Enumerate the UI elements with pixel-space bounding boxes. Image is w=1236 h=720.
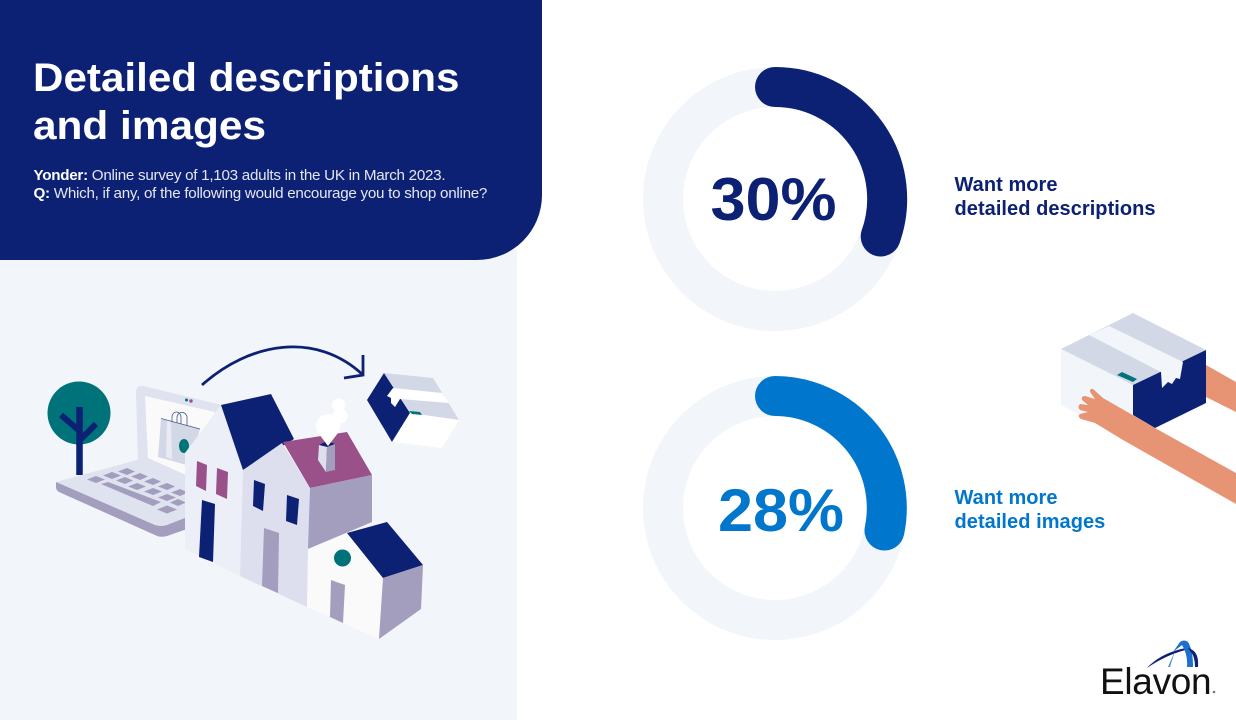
chimney and smoke [316,398,348,472]
label: want more detailed descriptions: detailed descriptions [954,198,1156,220]
logo: Elavon [1100,640,1215,702]
title: Detailed descriptions [33,56,460,100]
left arm and hand [1078,389,1236,504]
label: want more detailed images: detailed images [954,511,1105,533]
value: 30%: 30% [710,166,836,233]
survey source text: Q: Which, if any, of the following would encourage you to shop online? [34,185,487,202]
illustration: laptop [56,386,222,537]
value: 28%: 28% [718,477,844,544]
right arm [1206,365,1236,412]
chart: 28% donut [663,396,887,620]
illustration: tree [48,382,110,475]
keyboard keys [87,468,188,514]
panel: header [0,0,542,260]
house two [240,432,372,607]
title: and images [33,104,266,148]
illustration: houses [185,394,423,639]
house one [185,394,294,576]
arrow: laptop to parcel [202,347,363,385]
chart: 30% donut [663,87,887,311]
title [33,56,460,148]
label: want more detailed images: Want more [954,487,1058,509]
label: want more detailed descriptions: Want more [954,174,1058,196]
wordmark: Elavon [1100,661,1211,702]
icon: shopping bag [158,412,200,466]
panel: illustration background [0,250,517,720]
survey source text: Yonder: Online survey of 1,103 adults in the UK in March 2023. [34,167,445,184]
icon: small parcel [367,373,459,448]
illustration: hands holding parcel [1061,313,1236,504]
parcel [1061,313,1206,428]
house three [307,522,423,639]
